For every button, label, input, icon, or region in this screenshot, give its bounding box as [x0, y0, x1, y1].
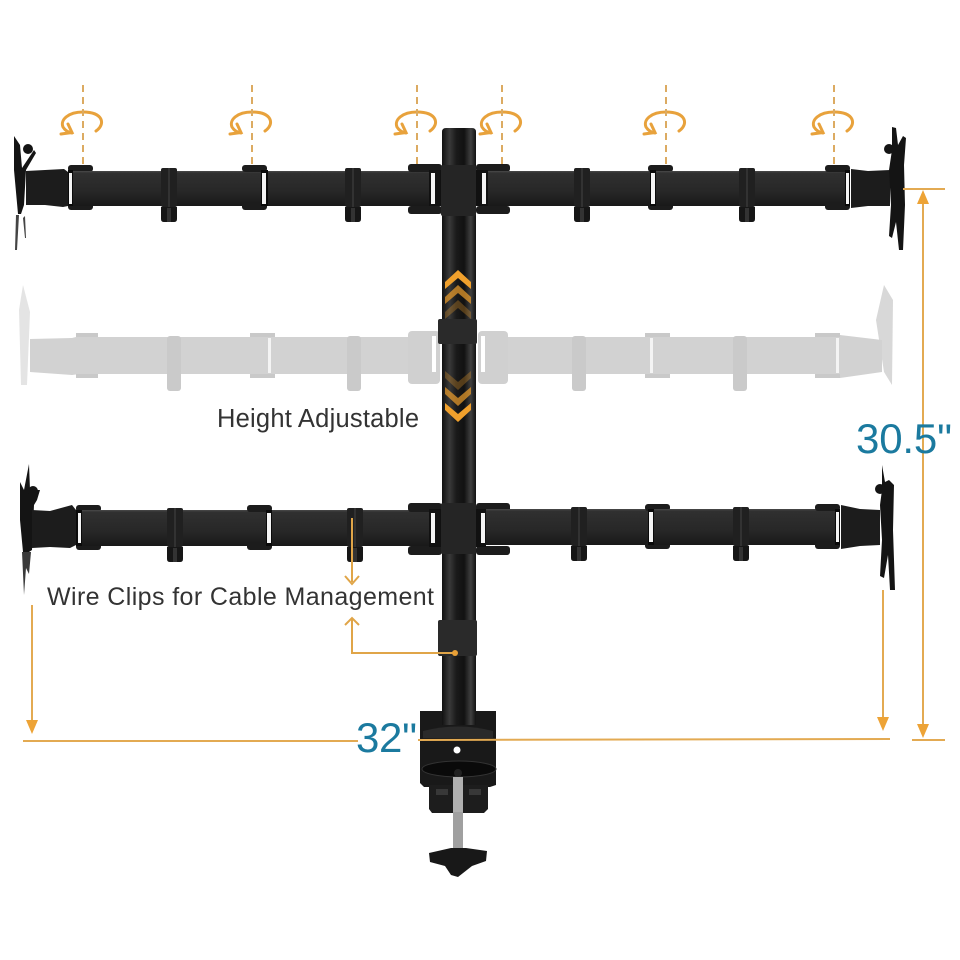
- clamp plate: [420, 711, 496, 787]
- dimension: right drop arrow: [877, 590, 889, 731]
- left VESA plate: [14, 136, 36, 250]
- threaded screw: [453, 777, 463, 812]
- left VESA plate: [20, 464, 40, 595]
- right VESA plate: [884, 127, 906, 250]
- right VESA plate: [875, 465, 895, 590]
- lower sleeve: [438, 620, 477, 656]
- dimension: height: [903, 189, 945, 740]
- height-adjust arrows: down: [445, 371, 471, 422]
- bottom arm: left: [20, 464, 442, 595]
- label: height adjustable: Height Adjustable: [217, 405, 419, 433]
- rotation icons: [61, 85, 853, 165]
- desk clamp: [420, 711, 496, 877]
- top arm: left: [14, 136, 442, 250]
- label: wire clips: Wire Clips for Cable Management: [47, 583, 434, 611]
- ghost arm: lower-opacity intermediate position: [19, 285, 893, 391]
- upper arm collar: [441, 165, 476, 216]
- clamp lower block: [429, 785, 488, 813]
- dimension: left drop arrow: [26, 605, 38, 734]
- callout arrow: pole cable clip: [345, 618, 458, 656]
- top arm: right: [476, 127, 906, 250]
- clamp knob: [429, 848, 487, 877]
- height-adjust arrows: up: [445, 270, 471, 319]
- pole: [438, 128, 477, 725]
- lower arm collar: [441, 503, 476, 554]
- callout arrow: wire clip: [345, 518, 359, 584]
- middle sleeve: [438, 319, 477, 344]
- dimension: width: [23, 739, 890, 741]
- label: width value: 32": [356, 714, 417, 761]
- bottom arm: right: [476, 465, 895, 590]
- label: height value: 30.5": [856, 415, 952, 462]
